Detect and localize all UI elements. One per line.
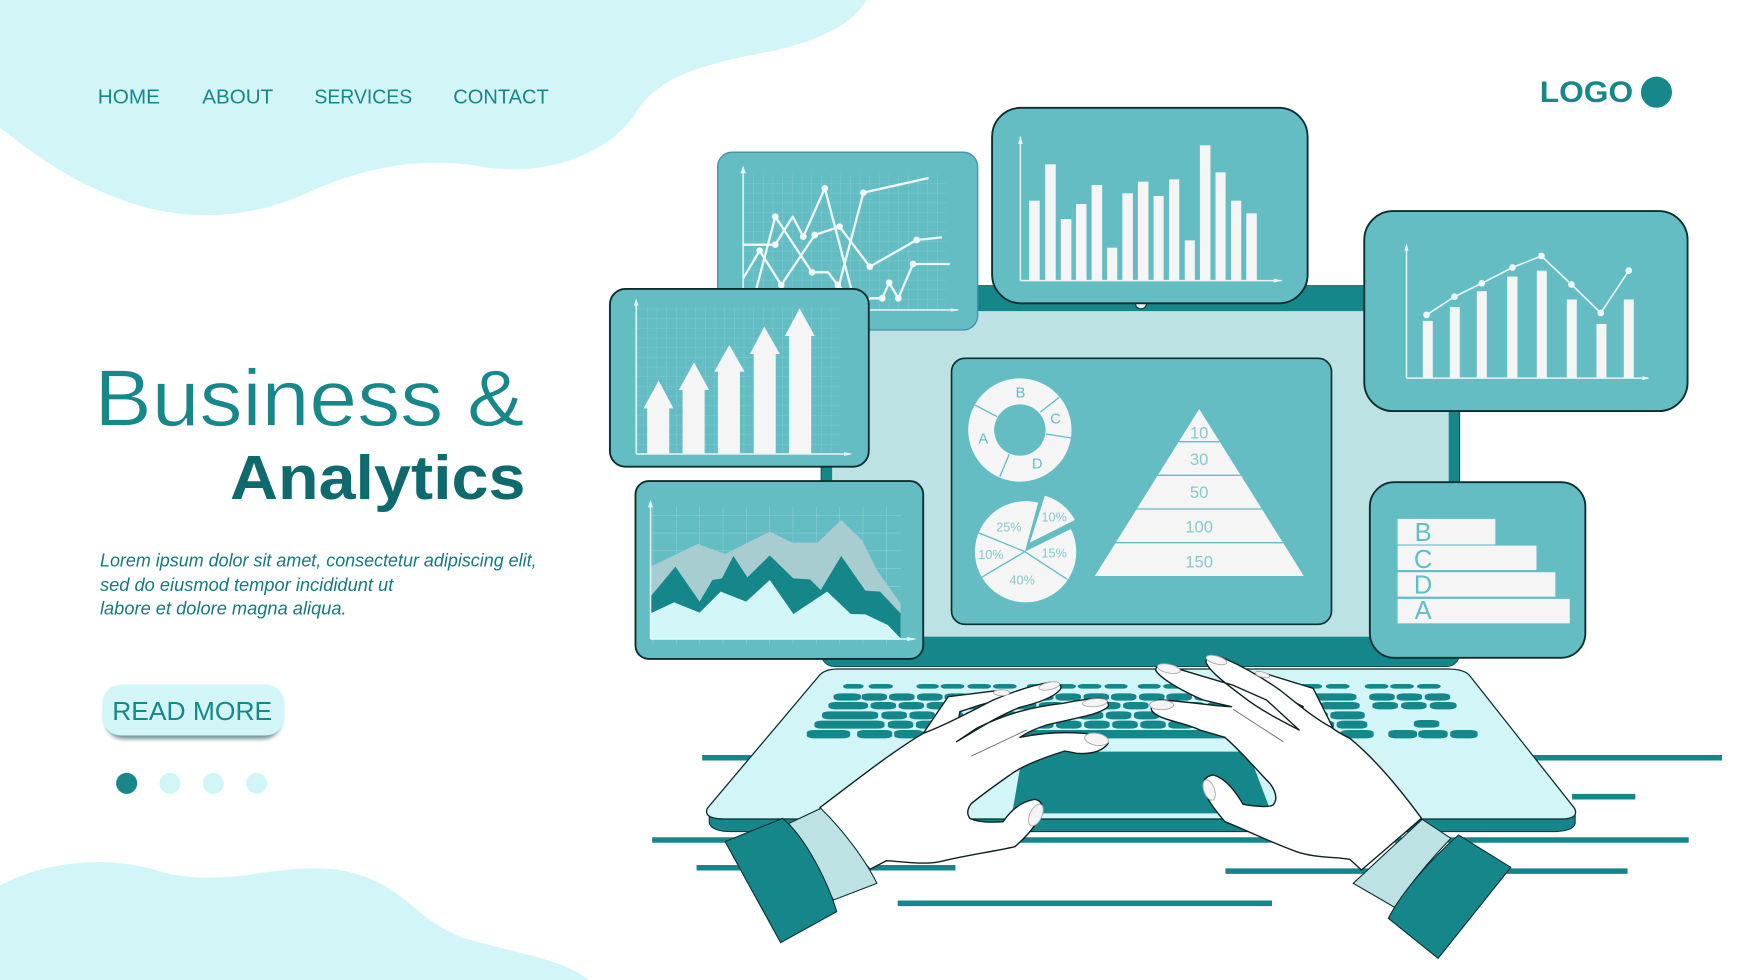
navigation menu: SERVICES xyxy=(314,86,412,108)
logo xyxy=(1540,76,1672,109)
navigation menu xyxy=(98,86,549,108)
panel: area chart xyxy=(635,481,923,659)
pie chart: 40% xyxy=(1010,573,1035,587)
panel: stacked horizontal bars: A xyxy=(1415,597,1432,625)
pyramid chart: 100 xyxy=(1185,517,1213,536)
panel: bar chart xyxy=(992,108,1308,303)
donut chart: C xyxy=(1050,411,1061,427)
panel: stacked horizontal bars: B xyxy=(1415,519,1432,547)
desk lines xyxy=(652,758,1722,903)
pyramid chart: 150 xyxy=(1185,553,1213,572)
navigation menu: CONTACT xyxy=(453,86,549,108)
navigation menu: ABOUT xyxy=(202,86,273,108)
pie chart: 10% xyxy=(978,548,1004,562)
pagination dots xyxy=(116,773,267,794)
panel: line chart xyxy=(718,152,978,330)
body text: Lorem ipsum dolor sit amet, consectetur adipiscing elit, xyxy=(100,551,537,572)
panel: stacked horizontal bars: D xyxy=(1414,571,1432,599)
navigation menu: HOME xyxy=(98,86,160,108)
read more button: READ MORE xyxy=(112,698,272,726)
panel: main dashboard on screen xyxy=(952,358,1331,624)
shirt cuffs xyxy=(725,808,1511,958)
pie chart xyxy=(975,496,1076,602)
pie chart: 10% xyxy=(1042,510,1067,524)
title: Business & xyxy=(94,354,524,443)
panel: stacked horizontal bars: C xyxy=(1414,546,1432,574)
pyramid chart: 30 xyxy=(1190,450,1208,469)
right hand xyxy=(1150,653,1421,870)
pyramid chart: 10 xyxy=(1190,423,1208,442)
pie chart: 15% xyxy=(1042,546,1067,560)
donut chart: B xyxy=(1016,385,1025,401)
panel: bars with line combo chart xyxy=(1364,211,1688,411)
keyboard xyxy=(807,684,1478,738)
left hand xyxy=(820,680,1109,869)
donut chart xyxy=(968,378,1072,482)
title xyxy=(94,354,525,513)
panel: rising arrows chart xyxy=(610,289,869,467)
pyramid chart xyxy=(1095,409,1304,576)
background blob: top left xyxy=(0,0,867,215)
pie chart: 25% xyxy=(996,520,1022,534)
laptop lid xyxy=(821,286,1460,667)
laptop base xyxy=(707,669,1576,832)
donut chart: D xyxy=(1032,457,1042,473)
title: Analytics xyxy=(230,444,525,513)
background blob: bottom left xyxy=(0,862,589,980)
panel: stacked horizontal bars xyxy=(1370,482,1585,658)
donut chart: A xyxy=(978,432,988,448)
read more button xyxy=(102,684,284,739)
trackpad xyxy=(1012,752,1272,813)
body text xyxy=(100,551,537,619)
body text: sed do eiusmod tempor incididunt ut xyxy=(100,575,394,596)
logo: LOGO xyxy=(1540,76,1633,109)
body text: labore et dolore magna aliqua. xyxy=(100,598,347,619)
pyramid chart: 50 xyxy=(1190,483,1208,502)
